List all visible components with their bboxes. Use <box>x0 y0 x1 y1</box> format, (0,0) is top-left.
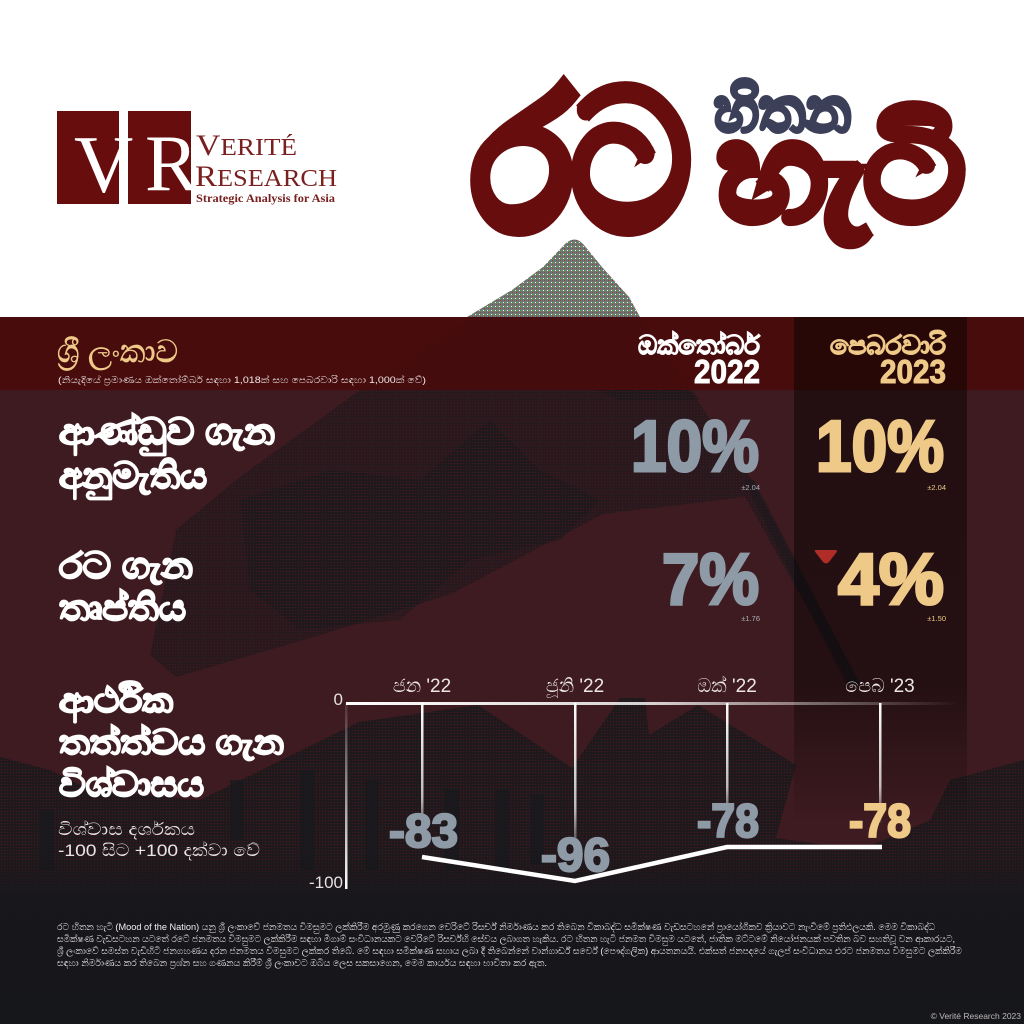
logo: Verité Research <box>57 111 337 210</box>
row label: approval of government: අනුමැතිය <box>59 455 207 500</box>
background photo: buildings and crowd silhouette <box>0 698 1024 1024</box>
title: Mood of the Nation: රට <box>473 57 690 269</box>
metric: October approval 10%: ±2.04 <box>741 483 760 492</box>
header band <box>0 317 1024 390</box>
row label: satisfaction with country: රට ගැන <box>59 545 193 586</box>
footnote text: සඳහා නිර්මාණය කර තිබෙන ප්‍රශ්න සහ ගණනය කිරීම් ශ්‍රී ලංකාවට ඔබිය ලෙස සකසාගෙන, මෙම කාර්යය සඳහා භාවිතා කර ඇත. <box>57 956 547 969</box>
row label: economic confidence: තත්ත්වය ගැන <box>59 723 284 762</box>
value labels: -83 <box>389 804 458 857</box>
flag tip above the band <box>467 239 640 317</box>
heading: Sri Lanka: ශ්‍රී ලංකාව <box>57 334 178 371</box>
drop lines <box>421 703 882 853</box>
metric: October approval 10%: 10% <box>631 407 759 487</box>
column header: February 2023: පෙබරවාරි <box>830 330 947 360</box>
line chart: economic confidence index <box>309 675 960 892</box>
logo: Verité Research: RESEARCH <box>195 160 337 193</box>
title: Mood of the Nation <box>473 57 964 269</box>
value labels: -96 <box>541 828 610 881</box>
row label: economic confidence <box>59 680 284 804</box>
metric: February satisfaction 4%: 4% <box>838 540 944 620</box>
logo: Verité Research: Strategic Analysis for Asia <box>196 193 335 205</box>
row label: economic confidence: ආර්ථික <box>59 680 173 723</box>
metric: February approval 10%: 10% <box>816 407 944 487</box>
logo: Verité Research: R <box>145 120 199 208</box>
metric: February satisfaction 4%: ±1.50 <box>927 614 946 623</box>
title: Mood of the Nation: හැටි <box>718 96 964 248</box>
footnote text: ශ්‍රී ලංකාවේ සමස්ත වැඩිහිටි ජනගහණය දරන ජනමතය විමසුමට ලක්කර තිබේ. මේ සඳහා සමීක්ෂණ සහාය ලබා දී තිබෙන්නේ වාන්ගාර්ඩ් සර්වේ (පෞද්ගලික) ආයතනයයි. එක්සත් ජනපදයේ ගැලප් සංවිධානය එරට ජනමතය විමසුමට ලක්කිරීම <box>57 944 962 957</box>
metric: February approval 10%: ±2.04 <box>927 483 946 492</box>
row label: approval of government: ආණ්ඩුව ගැන <box>59 411 275 457</box>
note: confidence index range: -100 සිට +100 දක්වා වේ <box>58 841 260 861</box>
note: confidence index range <box>58 820 260 861</box>
month labels <box>393 675 915 699</box>
row label: satisfaction with country: තෘප්තිය <box>59 587 186 628</box>
month labels: ජන '22 <box>393 676 451 697</box>
metric: October satisfaction 7%: 7% <box>662 540 759 620</box>
note: confidence index range: විශ්වාස දර්ශකය <box>58 820 195 840</box>
icon: red down triangle <box>815 550 837 564</box>
value labels: -78 <box>849 794 911 847</box>
value labels <box>389 794 911 881</box>
row label: economic confidence: විශ්වාසය <box>59 765 204 804</box>
background photo: flag silhouette <box>150 317 860 684</box>
month labels: ඔක් '22 <box>697 675 757 697</box>
axis label 0: 0 <box>334 690 343 709</box>
value labels: -78 <box>697 794 759 847</box>
month labels: පෙබ '23 <box>845 676 915 697</box>
heading: Sri Lanka <box>57 334 426 386</box>
logo: Verité Research: V <box>74 119 133 210</box>
copyright: © Verité Research 2023 <box>931 1011 1021 1021</box>
logo: Verité Research: VERITÉ <box>196 129 297 162</box>
footnote text: රට හිතන හැටි (Mood of the Nation) යනු ශ්‍රී ලංකාවේ ජනමතය විමසුමට ලක්කිරීම අරමුණු කරගෙන වෙරිටේ රිසර්ච් නිර්මාණය කර තිබෙන විකාබද්ධ සමීක්ෂණ වැඩසටහනේ ප්‍රායෝගිකව ක්‍රියාවට නැංවීමේ ප්‍රතිඵලයකි. මෙම විකාබද්ධ <box>57 920 936 933</box>
dark lower background <box>0 317 1024 1024</box>
heading: Sri Lanka: (නියැදියේ ප්‍රමාණය ඔක්තෝම්බර් සඳහා 1,018ක් සහ පෙබරවාරි සඳහා 1,000ක් වේ) <box>58 375 426 386</box>
axis label -100: -100 <box>309 873 343 892</box>
column header: October 2022: 2022 <box>694 353 760 390</box>
column header: October 2022: ඔක්තෝබර් <box>638 330 761 360</box>
y axis <box>345 703 348 889</box>
metric: October satisfaction 7%: ±1.76 <box>741 614 760 623</box>
column header: February 2023 <box>830 330 947 390</box>
footnote text <box>57 920 962 969</box>
footnote text: සමීක්ෂණ වැඩසටහන යටතේ රටේ ජනමතය විමසුමට ලක්කිරීම සඳහා මීගාම් සංවිධානයකට වෙරිටේ රිසර්ච්හි සේවය ලබාගත හැකිය. රට හිතන හැටි ජනමත විමසුම යටතේ, ජාතික මට්ටමේ නියෝජනයක් පවතින බව සහතිවූ වන ආකාරයට, <box>57 932 955 945</box>
data line <box>422 847 882 881</box>
column header: October 2022 <box>638 330 761 390</box>
row label: satisfaction with country <box>59 545 193 628</box>
white top background <box>0 0 1024 317</box>
row label: approval of government <box>59 411 275 500</box>
x axis <box>346 702 960 705</box>
month labels: ජූනි '22 <box>546 676 604 699</box>
column header: February 2023: 2023 <box>880 353 946 390</box>
February column highlight <box>794 317 967 827</box>
title: Mood of the Nation: හිතන <box>714 76 851 145</box>
